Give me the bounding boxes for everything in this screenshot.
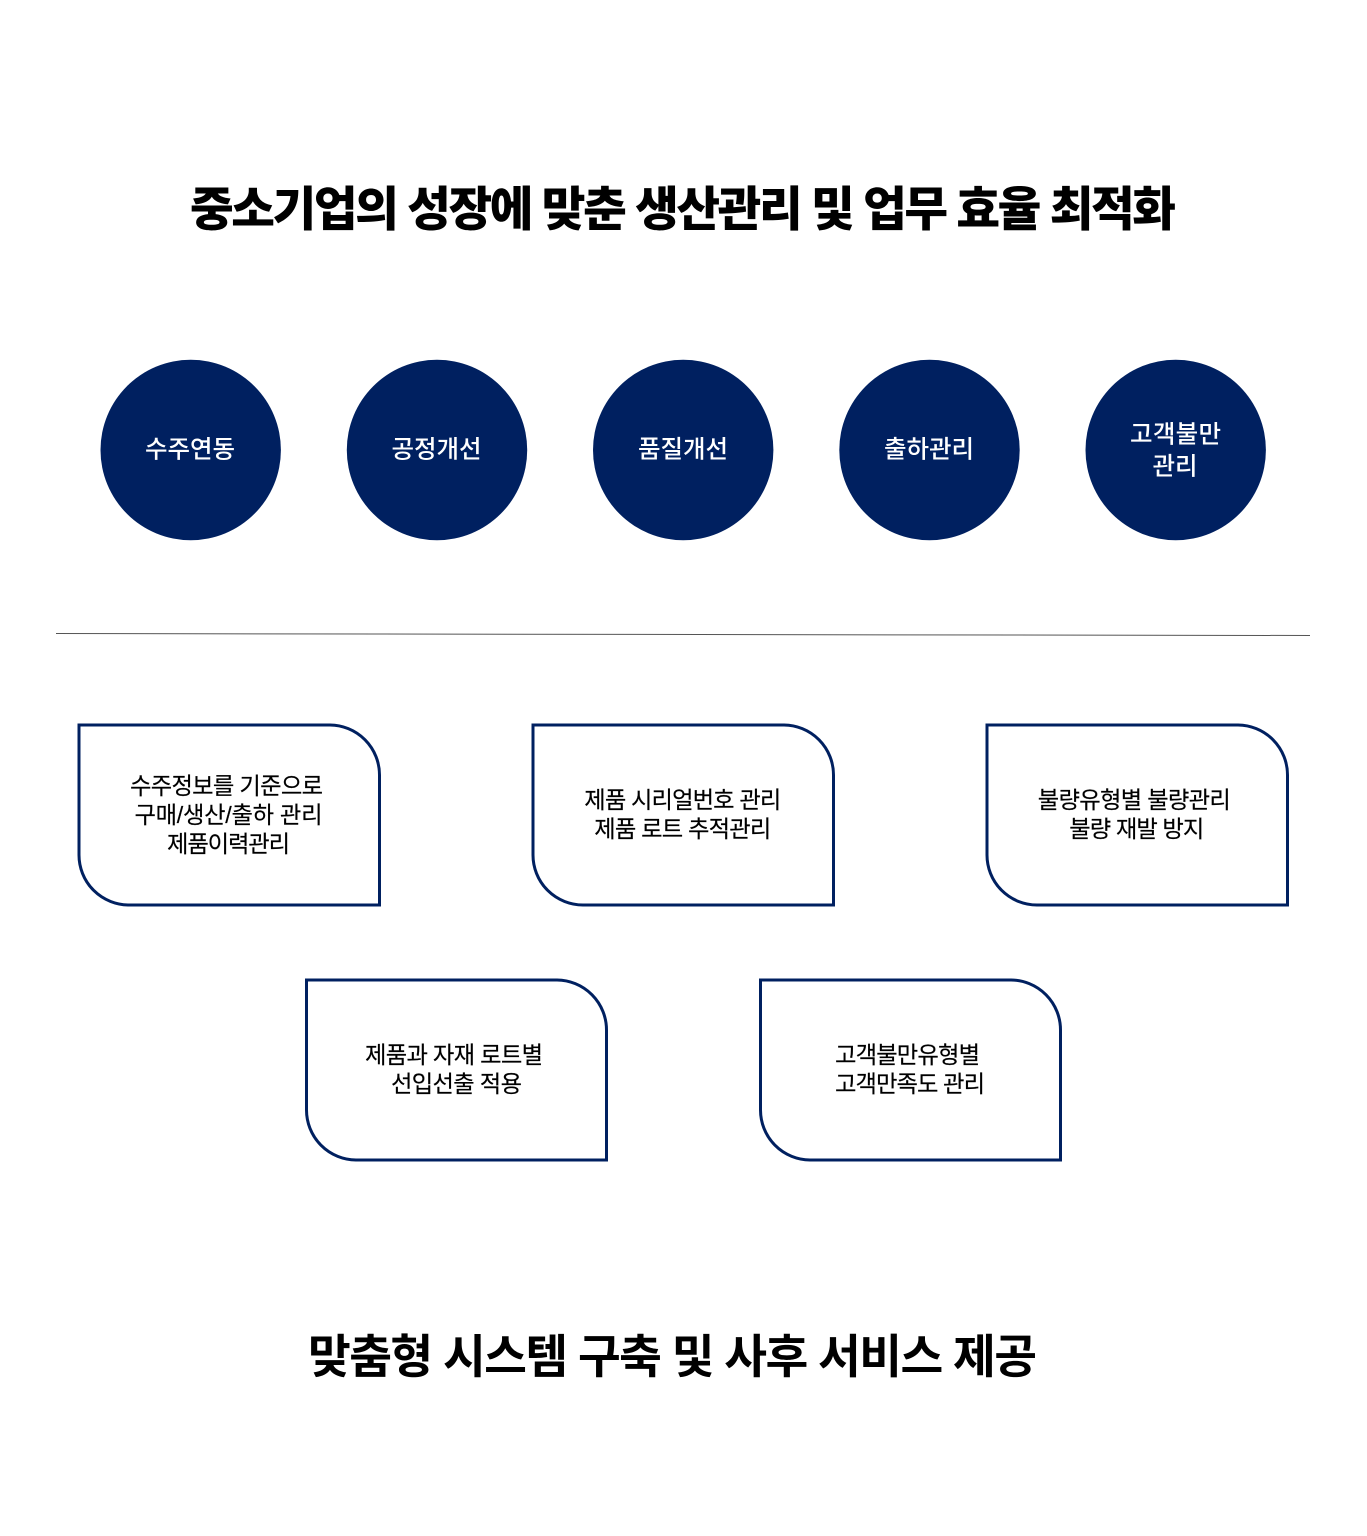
circle: 출하관리	[839, 360, 1020, 540]
card: 불량유형별	[987, 725, 1288, 905]
card: 제품 시리얼번호	[533, 725, 834, 905]
card: 수주정보: 구매/생산/출하 관리	[134, 802, 322, 828]
footer heading: 맞춤형 시스템 구축 및 사후 서비스 제공	[308, 1331, 1037, 1383]
card: 수주정보	[79, 725, 380, 905]
card: 제품과 자재: 선입선출 적용	[391, 1071, 522, 1097]
circles row	[100, 360, 1266, 540]
card: 고객불만유형별: 고객불만유형별	[835, 1042, 980, 1068]
circle: 출하관리: 출하관리	[884, 436, 974, 464]
card: 불량유형별: 불량유형별 불량관리	[1038, 787, 1231, 813]
cards row 2	[306, 980, 1060, 1160]
cards row 1	[79, 725, 1288, 905]
card: 수주정보: 제품이력관리	[167, 831, 290, 857]
card: 제품 시리얼번호: 제품 시리얼번호 관리	[584, 787, 781, 813]
circle: 품질개선	[593, 360, 773, 540]
card: 제품 시리얼번호: 제품 로트 추적관리	[594, 816, 771, 842]
circle: 수주연동	[100, 360, 281, 540]
circle: 고객불만 관리	[1086, 360, 1266, 540]
circle: 공정개선	[347, 360, 527, 540]
title: 중소기업의 성장에 맞춘 생산관리 및 업무 효율 최적화	[190, 184, 1176, 237]
circle: 공정개선: 공정개선	[392, 436, 482, 464]
card: 불량유형별: 불량 재발 방지	[1069, 816, 1204, 842]
card: 제품과 자재	[306, 980, 606, 1160]
circle: 고객불만 관리: 고객불만	[1130, 420, 1221, 448]
card: 수주정보: 수주정보를 기준으로	[130, 773, 323, 799]
circle: 품질개선: 품질개선	[638, 436, 728, 464]
card: 제품과 자재: 제품과 자재 로트별	[365, 1042, 543, 1068]
card: 고객불만유형별	[760, 980, 1060, 1160]
circle: 수주연동: 수주연동	[145, 436, 235, 464]
card: 고객불만유형별: 고객만족도 관리	[835, 1071, 985, 1097]
circle: 고객불만 관리: 관리	[1152, 452, 1198, 480]
